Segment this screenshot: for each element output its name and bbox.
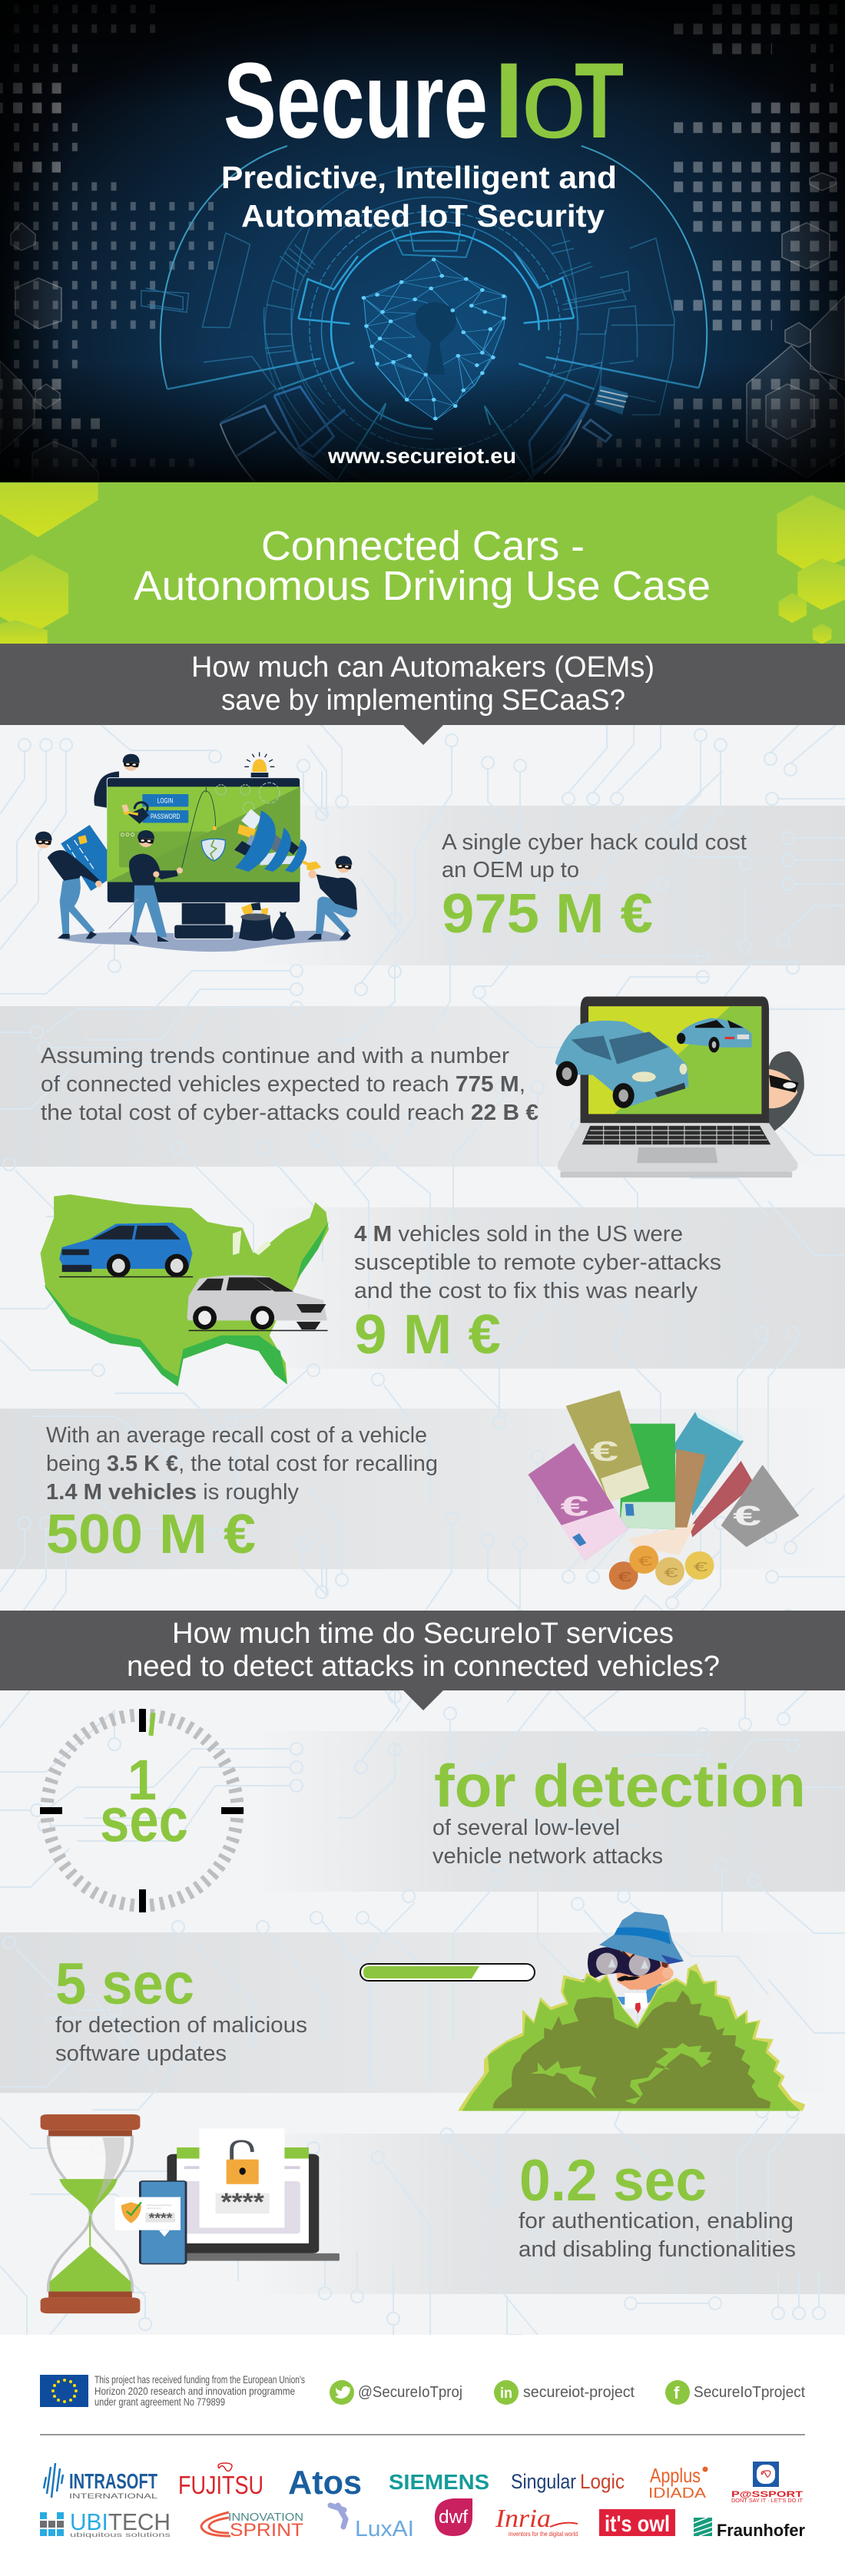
logo: Applus IDIADA: Applus	[650, 2464, 701, 2487]
logo: Siemens: SIEMENS	[389, 2470, 489, 2494]
logo: LuxAI	[330, 2505, 414, 2541]
hero subtitle: Predictive, Intelligent and	[221, 160, 617, 195]
footer: EU funding notice: Horizon 2020 research and innovation programme	[94, 2385, 295, 2397]
illustration: one second clock: sec	[100, 1786, 188, 1855]
social: linkedin: in	[500, 2386, 512, 2402]
social: facebook: f	[674, 2383, 680, 2402]
phone	[114, 2181, 186, 2264]
logo: SecureIoT: T	[575, 41, 624, 161]
illustration: secure login on laptop and phone	[114, 2128, 340, 2264]
footer: EU funding notice: under grant agreement No 779899	[94, 2396, 225, 2408]
footer: EU funding notice: This project has received funding from the European Union's	[94, 2373, 305, 2386]
band heading: Connected Cars -	[261, 523, 585, 569]
password card	[200, 2128, 284, 2228]
hook line	[182, 787, 216, 868]
hero subtitle: Automated IoT Security	[241, 198, 605, 233]
logo: Ubitech: ubiquitous solutions	[70, 2531, 171, 2538]
social: facebook: SecureIoTproject	[694, 2384, 805, 2401]
text: vehicles susceptible: susceptible to remote cyber-attacks	[354, 1250, 721, 1275]
center thief pulling line	[109, 830, 183, 944]
panel: dark question header 1: save by implementing SECaaS?	[221, 684, 625, 717]
illustration: euro banknotes and coins	[528, 1390, 799, 1590]
social: linkedin: secureiot-project	[523, 2384, 635, 2401]
right thief with drill	[302, 856, 357, 939]
text: single hack cost: A single cyber hack could cost	[442, 830, 747, 855]
login fields: LOGIN	[157, 797, 173, 805]
logo: Applus IDIADA: IDIADA	[648, 2485, 706, 2501]
logo: LuxAI: LuxAI	[355, 2517, 414, 2541]
text: recall cost	[46, 1423, 438, 1565]
text: total cost of attacks: Assuming trends continue and with a number	[41, 1044, 509, 1068]
footer: EU funding notice	[40, 2373, 305, 2408]
illustration: hourglass	[41, 2114, 140, 2313]
illustration: laptop with connected cars and hacker	[555, 996, 804, 1177]
detective	[582, 1912, 684, 2014]
login fields	[142, 794, 188, 823]
logo: SingularLogic: Logic	[580, 2470, 625, 2493]
illustration: one second clock: 1	[128, 1748, 157, 1812]
text: authentication time: 0.2 sec	[519, 2148, 707, 2213]
text: for detection: vehicle network attacks	[432, 1844, 663, 1869]
social: linkedin	[494, 2380, 635, 2405]
panel: dark question header 1	[0, 644, 845, 745]
panel: green title band	[0, 482, 845, 644]
text: vehicles susceptible: and the cost to fix this was nearly	[354, 1279, 698, 1303]
logo: dwf: dwf	[439, 2507, 468, 2528]
circuit traces	[0, 710, 845, 2335]
laptop keyboard	[558, 1123, 797, 1177]
logo: Ubitech	[40, 2508, 171, 2538]
text: five seconds: for detection of malicious	[55, 2013, 307, 2038]
laptop screen	[581, 996, 769, 1123]
text: five seconds: 5 sec	[55, 1952, 194, 2017]
logo: Intrasoft: INTRASOFT	[69, 2469, 157, 2493]
alarm light	[244, 752, 274, 778]
text: authentication time	[519, 2148, 796, 2262]
text: five seconds: software updates	[55, 2041, 227, 2066]
logo: Innovation Sprint	[201, 2511, 303, 2541]
hero subtitle	[221, 160, 617, 233]
text: single hack cost: 975 M €	[442, 883, 653, 945]
logo: Fraunhofer: Fraunhofer	[717, 2521, 805, 2540]
hacker	[765, 1051, 804, 1134]
logo: Intrasoft: INTERNATIONAL	[69, 2492, 157, 2500]
text: five seconds	[55, 1952, 307, 2066]
social: twitter	[330, 2380, 462, 2405]
hero data-grid pattern	[0, 0, 837, 474]
gears	[216, 783, 280, 813]
text: total cost of attacks	[41, 1044, 538, 1125]
illustration: euro banknotes and coins: €	[694, 1559, 708, 1574]
text: single hack cost: an OEM up to	[442, 858, 579, 882]
logo: Inria: inventors for the digital world	[509, 2531, 578, 2538]
login fields: PASSWORD	[151, 813, 181, 820]
broken shield	[201, 826, 225, 861]
large blue car	[555, 1021, 689, 1108]
hero translucent hexagons	[0, 173, 845, 482]
white crossover	[187, 1275, 328, 1331]
text: total cost of attacks: of connected vehicles expected to reach 775 M,	[41, 1072, 525, 1097]
text: authentication time: for authentication, enabling	[519, 2209, 794, 2233]
illustration: euro banknotes and coins: €	[733, 1502, 761, 1531]
bush dark layer	[493, 1991, 770, 2108]
logo: SecureIoT: o	[521, 39, 587, 161]
logo: SingularLogic	[511, 2470, 625, 2493]
text: recall cost: 500 M €	[46, 1504, 256, 1565]
left thief with credit card	[35, 825, 107, 939]
panel: dark question header 2	[0, 1611, 845, 1710]
text: authentication time: and disabling functionalities	[519, 2237, 796, 2262]
panel: dark question header 2: How much time do SecureIoT services	[172, 1617, 674, 1650]
logo: Passport	[731, 2462, 804, 2504]
illustration: euro banknotes and coins: €	[618, 1570, 632, 1584]
illustration: detective with binoculars in bush	[458, 1912, 805, 2111]
progress bar	[360, 1964, 535, 1981]
band heading	[134, 523, 711, 609]
logo: SecureIoT: I	[494, 40, 524, 161]
phone: ****	[149, 2211, 174, 2226]
logo: Inria	[495, 2505, 578, 2538]
logo: SingularLogic: Singular	[511, 2470, 576, 2493]
gradient row bands	[0, 806, 845, 2294]
logo: SecureIoT	[226, 62, 623, 138]
monitor	[107, 778, 300, 939]
panel: dark question header 1: How much can Automakers (OEMs)	[191, 651, 654, 684]
text: vehicles susceptible	[354, 1222, 721, 1366]
password card: ****	[221, 2187, 264, 2216]
illustration: one second clock	[40, 1709, 244, 1912]
logo: Passport: DONT SAY IT · LET'S DO IT	[731, 2498, 804, 2504]
flying data fragments	[234, 809, 307, 872]
hero circular tech rings	[141, 146, 707, 494]
laptop	[167, 2147, 340, 2261]
text: recall cost: 1.4 M vehicles is roughly	[46, 1480, 300, 1505]
text: vehicles susceptible: 9 M €	[354, 1304, 501, 1366]
logo: it's owl: it's owl	[605, 2511, 670, 2537]
logo: Passport: P@SSPORT	[731, 2490, 803, 2499]
logo: Intrasoft	[44, 2463, 157, 2500]
logo: Ubitech: UBITECH	[70, 2508, 171, 2535]
text: recall cost: being 3.5 K €, the total cost for recalling	[46, 1452, 438, 1476]
social: facebook	[665, 2380, 805, 2405]
blue SUV	[59, 1223, 193, 1277]
partner logos	[40, 2462, 805, 2541]
hero banner	[0, 0, 845, 494]
logo: Fujitsu: FUJITSU	[178, 2471, 263, 2499]
illustration: euro banknotes and coins: €	[561, 1492, 589, 1521]
bush highlights	[530, 2061, 597, 2099]
text: recall cost: With an average recall cost of a vehicle	[46, 1423, 427, 1448]
illustration: euro banknotes and coins: €	[664, 1565, 678, 1580]
text: for detection: for detection	[434, 1752, 806, 1819]
logo: Fujitsu	[178, 2463, 263, 2499]
text: vehicles susceptible: 4 M vehicles sold in the US were	[354, 1222, 683, 1247]
text: single hack cost	[442, 830, 747, 945]
bush outer layer	[458, 1964, 805, 2111]
illustration: US map with cars	[41, 1194, 329, 1386]
logo: SecureIoT: Secure	[224, 40, 488, 161]
band heading: Autonomous Driving Use Case	[134, 563, 711, 609]
panel: content background with circuit traces	[0, 710, 845, 2335]
website url: www.secureiot.eu	[327, 444, 516, 468]
bush middle layer	[462, 1969, 800, 2111]
text: total cost of attacks: the total cost of cyber-attacks could reach 22 B €	[41, 1101, 538, 1125]
stolen loot bags	[239, 902, 295, 941]
logo: Applus IDIADA	[648, 2464, 708, 2501]
text: for detection	[432, 1752, 806, 1869]
logo: Innovation Sprint: SPRINT	[230, 2520, 303, 2541]
text: for detection: of several low-level	[432, 1816, 620, 1840]
logo: Inria: Inria	[495, 2505, 551, 2533]
illustration: thieves attacking a computer	[35, 752, 357, 952]
padlock and key	[121, 803, 149, 824]
small blue car	[676, 1018, 752, 1052]
logo: dwf	[435, 2498, 472, 2536]
icon: network shield with keyhole	[362, 258, 506, 420]
panel: dark question header 2: need to detect attacks in connected vehicles?	[127, 1651, 720, 1683]
logo: Innovation Sprint: INNOVATION	[228, 2511, 303, 2524]
logo: Fraunhofer	[694, 2518, 805, 2540]
illustration: euro banknotes and coins: €	[590, 1437, 618, 1467]
logo: Atos: Atos	[288, 2464, 362, 2502]
social: twitter: @SecureIoTproj	[358, 2384, 462, 2401]
top thief	[94, 754, 140, 810]
illustration: euro banknotes and coins: €	[638, 1554, 652, 1568]
